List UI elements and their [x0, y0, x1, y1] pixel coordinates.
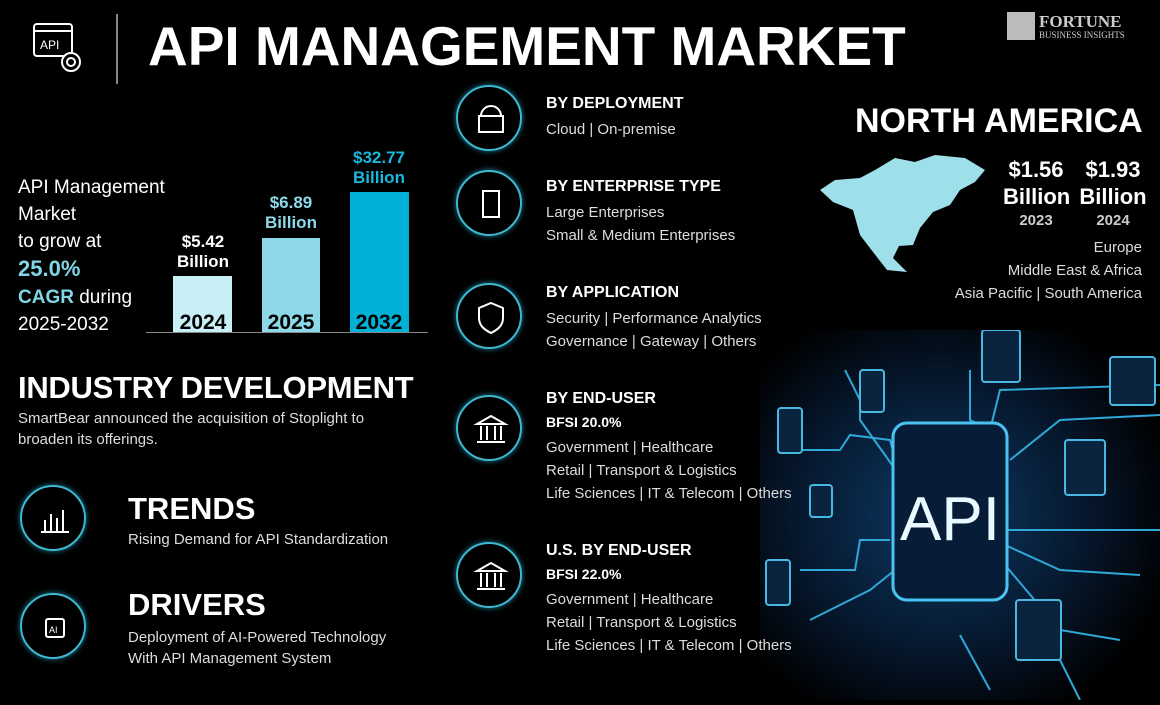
- icon: API gear: [33, 23, 81, 72]
- industry development: [18, 370, 414, 448]
- trends: [16, 480, 388, 556]
- by enterprise: Large Enterprises: [546, 204, 664, 221]
- growth text: API Management Market: [18, 177, 165, 225]
- by enterprise: BY ENTERPRISE TYPE: [546, 178, 721, 195]
- us by end-user: U.S. BY END-USER: [546, 542, 692, 559]
- bar chart: 2032: [356, 311, 402, 334]
- growth text: 2025-2032: [18, 314, 109, 335]
- by deployment: BY DEPLOYMENT: [546, 95, 684, 112]
- by application: [546, 284, 762, 350]
- us by end-user: Government | Healthcare: [546, 591, 713, 608]
- drivers: Deployment of AI-Powered Technology: [128, 629, 386, 646]
- stats 2024: $1.93: [1085, 157, 1141, 182]
- by enterprise: Small & Medium Enterprises: [546, 227, 735, 244]
- growth text: [18, 177, 165, 335]
- by enterprise: [546, 178, 735, 244]
- growth text: to grow at: [18, 231, 101, 252]
- by application: BY APPLICATION: [546, 284, 679, 301]
- industry development: INDUSTRY DEVELOPMENT: [18, 370, 413, 405]
- by end-user: [546, 390, 792, 502]
- regions list: Europe: [1094, 239, 1142, 256]
- us by end-user: Life Sciences | IT & Telecom | Others: [546, 637, 792, 654]
- icon: building: [456, 170, 522, 236]
- stats 2024: 2024: [1096, 212, 1130, 229]
- bar chart: Billion: [177, 252, 229, 271]
- by deployment: [546, 95, 684, 138]
- logo: FORTUNE: [1039, 12, 1122, 31]
- stats 2024: Billion: [1079, 184, 1147, 209]
- bar chart: [146, 148, 428, 334]
- drivers: DRIVERS: [128, 587, 266, 622]
- icon: shield: [456, 283, 522, 349]
- by application: Security | Performance Analytics: [546, 310, 762, 327]
- drivers: [16, 587, 386, 667]
- industry development: SmartBear announced the acquisition of Stoplight to broaden its offerings.: [18, 410, 364, 448]
- by deployment: Cloud | On-premise: [546, 121, 676, 138]
- by end-user: Life Sciences | IT & Telecom | Others: [546, 485, 792, 502]
- bar chart: 2024: [180, 311, 226, 334]
- stats 2024: [1079, 157, 1147, 229]
- bar chart: $6.89: [270, 193, 312, 212]
- north america heading: NORTH AMERICA: [855, 102, 1143, 140]
- by end-user: BFSI 20.0%: [546, 414, 621, 430]
- trends: Rising Demand for API Standardization: [128, 531, 388, 548]
- growth text: CAGR during: [18, 287, 132, 308]
- us by end-user: BFSI 22.0%: [546, 566, 621, 582]
- stats 2023: [1003, 157, 1070, 229]
- drivers: With API Management System: [128, 650, 331, 667]
- bar chart: $5.42: [182, 232, 224, 251]
- logo: BUSINESS INSIGHTS: [1039, 30, 1125, 40]
- bar chart: Billion: [353, 168, 405, 187]
- stats 2023: 2023: [1019, 212, 1053, 229]
- bar chart: $32.77: [353, 148, 405, 167]
- trends: TRENDS: [128, 491, 255, 526]
- title: API MANAGEMENT MARKET: [148, 15, 906, 77]
- by end-user: Government | Healthcare: [546, 439, 713, 456]
- icon: bank us: [456, 542, 522, 608]
- drivers: AI: [49, 625, 58, 635]
- by end-user: BY END-USER: [546, 390, 656, 407]
- regions list: [954, 239, 1142, 302]
- stats 2023: $1.56: [1008, 157, 1064, 182]
- us by end-user: [546, 542, 792, 654]
- growth text: 25.0%: [18, 256, 80, 281]
- by end-user: Retail | Transport & Logistics: [546, 462, 737, 479]
- by application: Governance | Gateway | Others: [546, 333, 756, 350]
- bar chart: Billion: [265, 213, 317, 232]
- icon: API gear: API: [40, 38, 59, 52]
- background art: API chip: API: [900, 485, 1000, 554]
- background art: API chip: [760, 330, 1160, 700]
- stats 2023: Billion: [1003, 184, 1070, 209]
- logo: [1007, 12, 1125, 40]
- us by end-user: Retail | Transport & Logistics: [546, 614, 737, 631]
- regions list: Asia Pacific | South America: [955, 285, 1142, 302]
- map: [820, 155, 985, 272]
- icon: cloud: [456, 85, 522, 151]
- icon: bank: [456, 395, 522, 461]
- regions list: Middle East & Africa: [1008, 262, 1142, 279]
- bar chart: 2025: [268, 311, 314, 334]
